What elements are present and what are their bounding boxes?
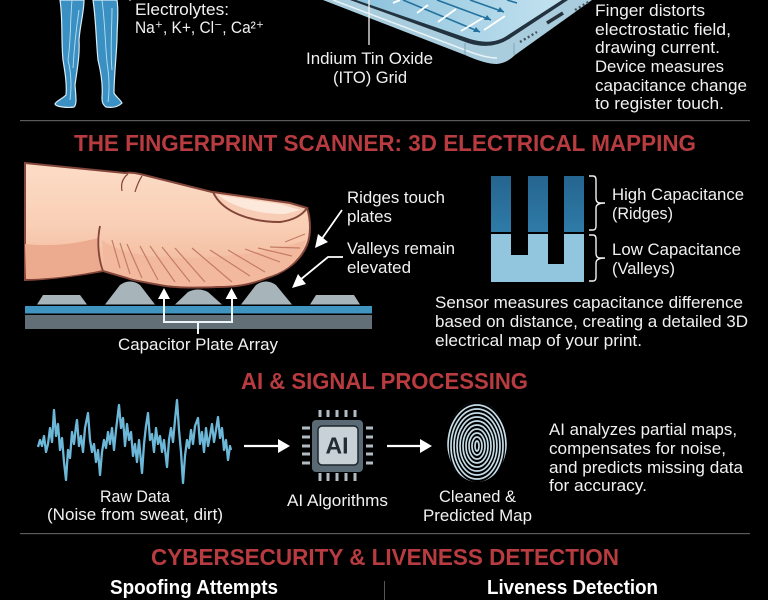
label: cleaned and predicted map: Predicted Map [423, 506, 532, 525]
text: electrolytes [130, 0, 264, 37]
callout: ITO grid label: Indium Tin Oxide [306, 49, 433, 68]
label: valleys remain elevated: Valleys remain [347, 239, 455, 258]
icon: AI chip: AI [326, 432, 348, 458]
icon: human legs [55, 0, 122, 107]
text: touch explanation: to register touch. [595, 94, 724, 113]
label: ridges touch plates: Ridges touch [347, 188, 445, 207]
label: raw data: (Noise from sweat, dirt) [47, 505, 223, 524]
label: high capacitance: High Capacitance [612, 185, 744, 204]
text: touch explanation: electrostatic field, [595, 20, 731, 39]
text: touch explanation: drawing current. [595, 38, 720, 57]
text: sensor explanation: based on distance, creating a detailed 3D [435, 312, 748, 331]
heading: cybersecurity: CYBERSECURITY & LIVENESS DETECTION [151, 544, 619, 570]
chart: raw waveform [38, 400, 231, 483]
text: electrolytes: Electrolytes: [135, 0, 229, 19]
label: capacitor plate array: Capacitor Plate Array [118, 335, 278, 354]
brace: high capacitance [589, 176, 605, 230]
arrow: ridges [315, 210, 342, 248]
panel: phone touchscreen [306, 0, 747, 113]
text: sensor explanation [435, 293, 748, 350]
label: cleaned and predicted map: Cleaned & [439, 487, 517, 506]
arrow: raw data to AI [244, 439, 290, 453]
panel: body conductivity [55, 0, 264, 107]
panel: fingerprint scanner diagram [25, 163, 455, 354]
subheading: liveness detection: Liveness Detection [487, 577, 658, 599]
arrow: valleys [292, 257, 343, 288]
label: raw data: Raw Data [100, 487, 171, 506]
arrows: capacitor plate array [158, 288, 238, 334]
label: low capacitance: Low Capacitance [612, 240, 741, 259]
icon: AI chip [302, 410, 373, 481]
label: high capacitance: (Ridges) [612, 204, 673, 223]
icon: finger [25, 163, 310, 288]
text: touch explanation: Device measures [595, 57, 724, 76]
text: touch explanation: capacitance change [595, 76, 747, 95]
text: touch explanation [595, 1, 747, 113]
brace: low capacitance [589, 235, 605, 281]
subheading: spoofing attempts: Spoofing Attempts [110, 577, 278, 599]
label: low capacitance: (Valleys) [612, 259, 675, 278]
icon: phone corner [323, 0, 592, 64]
callout: ITO grid label: (ITO) Grid [333, 68, 407, 87]
text: sensor explanation: electrical map of your print. [435, 331, 642, 350]
icon: fingerprint [447, 402, 507, 482]
text: AI explanation: compensates for noise, [549, 439, 726, 458]
label: low capacitance [612, 240, 741, 278]
icon: sensor layers and ridges [25, 282, 372, 329]
callout: ITO grid label [306, 0, 433, 87]
heading: AI and signal processing: AI & SIGNAL PROCESSING [241, 368, 528, 394]
label: valleys remain elevated [347, 239, 455, 277]
label: high capacitance [612, 185, 744, 223]
label: valleys remain elevated: elevated [347, 258, 411, 277]
label: cleaned and predicted map [423, 487, 532, 525]
label: ridges touch plates [347, 188, 445, 226]
text: sensor explanation: Sensor measures capacitance difference [435, 293, 743, 312]
chart: capacitance bars [491, 176, 744, 282]
text: touch explanation: Finger distorts [595, 1, 705, 20]
label: ridges touch plates: plates [347, 207, 392, 226]
text: AI explanation: AI analyzes partial maps, [549, 420, 737, 439]
label: raw data [47, 487, 223, 524]
heading: fingerprint scanner: THE FINGERPRINT SCANNER: 3D ELECTRICAL MAPPING [74, 130, 696, 156]
text: AI explanation: for accuracy. [549, 476, 647, 495]
text: electrolytes: Na⁺, K+, Cl⁻, Ca²⁺ [135, 18, 264, 37]
text: AI explanation: and predicts missing data [549, 458, 744, 477]
text: AI explanation [549, 420, 744, 495]
label: AI algorithms: AI Algorithms [287, 491, 388, 510]
arrow: AI to map [387, 439, 432, 453]
panel: signal processing flow [38, 393, 744, 525]
